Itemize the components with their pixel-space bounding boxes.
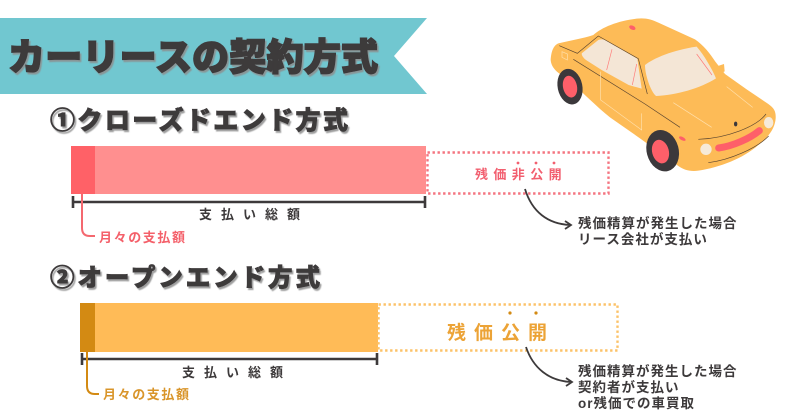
bracket: total payments	[82, 353, 377, 365]
note: closed end: 残価精算が発生した場合	[578, 215, 738, 231]
bar: closed end total	[71, 146, 426, 194]
front wheel	[642, 126, 684, 175]
arrow: open end note	[526, 347, 572, 386]
bracket: total payments	[73, 196, 425, 208]
title ribbon	[0, 18, 427, 94]
label: total payments: 支払い総額	[199, 207, 309, 222]
bar: open end total	[80, 303, 378, 352]
label: monthly payment: 月々の支払額	[99, 230, 187, 245]
car detail lines	[559, 36, 769, 163]
note: closed end: リース会社が支払い	[578, 231, 708, 247]
car illustration	[551, 18, 776, 175]
label: monthly payment: 月々の支払額	[103, 387, 191, 402]
side windows	[582, 39, 642, 89]
rear wheel	[554, 66, 586, 107]
title: カーリースの契約方式	[8, 37, 378, 78]
label: residual disclosed: 残価公開	[447, 321, 555, 344]
heading: open end: ②オープンエンド方式	[50, 263, 320, 292]
leader: monthly payment	[87, 352, 99, 394]
label: total payments: 支払い総額	[182, 365, 292, 380]
note: open end: 残価精算が発生した場合	[578, 363, 738, 379]
note: open end: 契約者が支払い	[578, 379, 680, 395]
heading: closed end: ①クローズドエンド方式	[50, 106, 348, 135]
arrow: closed end note	[525, 189, 571, 229]
label: residual undisclosed: 残価非公開	[475, 167, 567, 182]
leader: monthly payment	[82, 194, 95, 236]
headlights	[700, 117, 773, 155]
dotted box: residual undisclosed	[428, 152, 608, 194]
grille	[719, 131, 759, 148]
windshield	[645, 47, 716, 96]
dotted box: residual disclosed	[378, 304, 618, 350]
note: open end: or残価での車買取	[578, 395, 695, 411]
